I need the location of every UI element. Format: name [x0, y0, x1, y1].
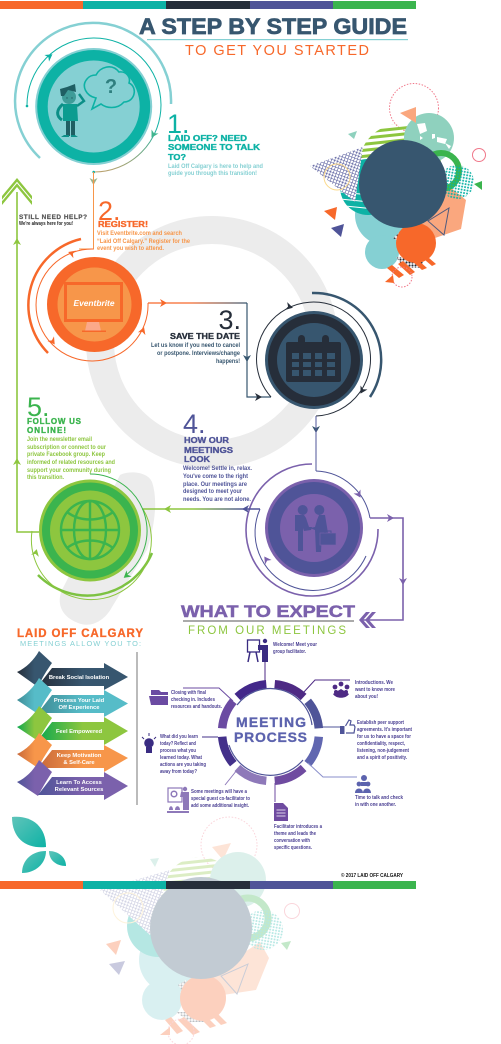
- step 5 text: subscription or connect to our: [27, 445, 107, 451]
- process item: peer support agreements: agreements. It's important: [357, 727, 412, 733]
- connector: green feedback line: [2, 178, 39, 532]
- arrows: step 2: [47, 248, 167, 347]
- process item: guest co-facilitator: [167, 770, 250, 813]
- process item: reflection: process what you: [160, 748, 196, 754]
- step 1 text: [167, 109, 263, 177]
- process item: reflection: learned today. What: [160, 755, 202, 761]
- step 4 text: place. Our meetings are: [183, 482, 248, 488]
- arrow: process your laid off experience: [17, 678, 128, 717]
- step 3 circle: [257, 293, 381, 416]
- arrow: learn to access relevant sources: [17, 760, 128, 800]
- process item: facilitator theme: Facilitator introduces a: [274, 824, 323, 830]
- step 1 circle: [15, 23, 171, 173]
- connector: step 1 to 2: [79, 172, 94, 249]
- arrows: step 1: [44, 51, 158, 185]
- title: TO GET YOU STARTED: [185, 43, 369, 59]
- process item: closing: checking in. Includes: [171, 697, 215, 703]
- arrow: keep motivation and self-care: & Self-Care: [63, 760, 95, 766]
- copyright: © 2017 LAID OFF CALGARY: [341, 872, 403, 879]
- step 5 text: this transition.: [27, 475, 64, 481]
- magnifier background: [60, 230, 324, 625]
- step 2 text: 2.: [98, 196, 121, 226]
- arrow: learn to access relevant sources: Learn To Access: [56, 780, 102, 786]
- step 2 circle: [28, 239, 148, 361]
- step 4 text: MEETINGS: [184, 446, 234, 455]
- laid off calgary heading: [17, 628, 143, 648]
- meeting process label: MEETING: [236, 714, 306, 730]
- process item: check in: Time to talk and check: [355, 795, 404, 801]
- icon: globe: [61, 501, 119, 559]
- connector: step 4 to 5: [142, 508, 260, 510]
- icon: calendar: [286, 335, 341, 382]
- process item: facilitator theme: [274, 783, 323, 851]
- process item: check in: [308, 763, 404, 808]
- process item: peer support agreements: for us to have a space for: [357, 734, 412, 740]
- bottom colour bar: [0, 881, 416, 889]
- arrow: learn to access relevant sources: Relevant Sources: [55, 787, 103, 793]
- background art: faded lower shapes: [100, 817, 300, 1044]
- step 3 text: happens!: [216, 359, 240, 365]
- step 1 text: 1.: [167, 109, 190, 139]
- step 2 text: [97, 196, 191, 252]
- icon: handshake: [295, 505, 336, 552]
- step 3 text: Let us know if you need to cancel: [151, 343, 240, 349]
- arrow: break social isolation: [17, 651, 128, 690]
- process item: peer support agreements: confidentiality, respect,: [357, 741, 405, 747]
- step 1 text: SOMEONE TO TALK: [168, 143, 260, 152]
- process item: reflection: today? Reflect and: [160, 741, 196, 747]
- meeting process ring: [222, 684, 319, 781]
- step 5 text: ONLINE!: [27, 426, 66, 435]
- still need help text: We're always here for you!: [19, 221, 73, 227]
- step 3 text: 3.: [218, 305, 241, 335]
- step 1 text: LAID OFF? NEED: [168, 134, 247, 143]
- step 1 text: Laid Off Calgary is here to help and: [168, 164, 263, 170]
- step 5 text: FOLLOW US: [27, 417, 82, 426]
- icon: monitor: Eventbrite: [74, 298, 115, 308]
- step 4 circle: [246, 464, 378, 596]
- icon: thought cloud: [84, 67, 134, 109]
- process item: facilitator theme: theme and leads the: [274, 831, 316, 837]
- divider: [136, 652, 138, 805]
- step 4 text: LOOK: [184, 455, 210, 464]
- process item: reflection: What did you learn: [160, 734, 198, 740]
- step 2 text: REGISTER!: [98, 220, 148, 229]
- step 5 text: support your community during: [27, 468, 111, 474]
- still need help text: STILL NEED HELP?: [19, 214, 87, 221]
- what to expect heading: [181, 603, 376, 637]
- arrows: step 3: [243, 302, 367, 433]
- process item: introductions: want to know more: [354, 687, 395, 693]
- top colour bar: [0, 1, 416, 9]
- arrow: process your laid off experience: Process Your Laid: [54, 698, 105, 704]
- step 4 text: designed to meet your: [183, 489, 243, 495]
- arrow: break social isolation: Break Social Isolation: [49, 675, 110, 681]
- arrow: process your laid off experience: Off Experience: [59, 705, 100, 711]
- process item: check in: in with one another.: [355, 802, 396, 808]
- process item: welcome: group facilitator.: [273, 649, 306, 655]
- process item: peer support agreements: listening, non-judgement: [357, 748, 409, 754]
- step 2 text: event you wish to attend.: [97, 246, 164, 252]
- step 1 text: guide you through this transition!: [168, 171, 257, 177]
- connector: step 4 to what to expect: [362, 518, 403, 620]
- process item: closing: Closing with final: [171, 690, 206, 696]
- arrows: step 5: [13, 238, 171, 581]
- process item: guest co-facilitator: add some additional insight.: [191, 803, 249, 809]
- step 5 text: 5.: [27, 392, 50, 422]
- step 5 text: Join the newsletter email: [27, 437, 92, 443]
- step 5 circle: [31, 474, 152, 600]
- process item: guest co-facilitator: special guest co-facilitator to: [191, 796, 250, 802]
- process item: peer support agreements: and a spirit of positivity.: [357, 755, 407, 761]
- process item: peer support agreements: [322, 720, 412, 761]
- process item: closing: resources and handouts.: [171, 704, 222, 710]
- step 4 text: [183, 409, 252, 503]
- still need help text: [19, 214, 87, 227]
- logo: leaves: [12, 817, 66, 873]
- decorative shape cluster: [310, 84, 486, 287]
- arrow: keep motivation and self-care: Keep Motivation: [57, 753, 102, 759]
- step 2 text: Visit Eventbrite.com and search: [97, 231, 182, 237]
- step 2 text: “Laid Off Calgary.” Register for the: [97, 239, 191, 245]
- step 1 text: TO?: [168, 153, 186, 162]
- step 4 text: needs. You are not alone.: [183, 497, 251, 503]
- arrow: feel empowered: Feel Empowered: [56, 729, 102, 735]
- connector: step 3 to 4: [315, 416, 317, 471]
- process item: facilitator theme: conversation with: [274, 838, 310, 844]
- step 5 text: private Facebook group. Keep: [27, 452, 105, 458]
- process item: welcome: Welcome! Meet your: [273, 642, 318, 648]
- step 4 text: 4.: [183, 409, 206, 439]
- process item: guest co-facilitator: Some meetings will have a: [191, 789, 248, 795]
- step 4 text: You've come to the right: [183, 474, 248, 480]
- arrows: step 4: [242, 490, 407, 585]
- step 3 text: [151, 305, 241, 365]
- laid off calgary heading: LAID OFF CALGARY: [17, 628, 143, 640]
- step 3 text: or postpone. Interviews/change: [157, 351, 241, 357]
- process item: welcome: [248, 639, 318, 682]
- process item: reflection: actions are you taking: [160, 762, 206, 768]
- title: A STEP BY STEP GUIDE: [139, 14, 407, 39]
- ribbon arrows list: [17, 651, 128, 800]
- connector: step 2 to 3: [148, 303, 271, 397]
- process item: closing: [149, 688, 233, 710]
- what to expect heading: WHAT TO EXPECT: [181, 603, 355, 621]
- arrow: keep motivation and self-care: [17, 733, 128, 772]
- step 5 text: informed of related resources and: [27, 460, 115, 466]
- meeting process label: PROCESS: [234, 729, 307, 745]
- step 5 text: [27, 392, 115, 481]
- arrow: feel empowered: [17, 706, 128, 745]
- title: [139, 14, 408, 59]
- meeting process label: [234, 714, 307, 745]
- icon: thought cloud: ?: [105, 76, 117, 98]
- icon: confused man: [58, 84, 84, 137]
- process item: facilitator theme: specific questions.: [274, 845, 312, 851]
- process item: introductions: [303, 680, 395, 700]
- process item: reflection: [142, 733, 218, 775]
- process item: peer support agreements: Establish peer support: [357, 720, 404, 726]
- icon: chevrons: [359, 612, 376, 628]
- step 4 text: Welcome! Settle in, relax.: [183, 466, 252, 472]
- process item: reflection: away from today?: [160, 769, 197, 775]
- step 3 text: SAVE THE DATE: [170, 332, 241, 341]
- step 4 text: HOW OUR: [184, 436, 229, 445]
- laid off calgary heading: MEETINGS ALLOW YOU TO:: [20, 639, 141, 648]
- process item: introductions: about you!: [355, 694, 378, 700]
- process item: introductions: Introductions. We: [355, 680, 393, 686]
- what to expect heading: FROM OUR MEETINGS: [188, 625, 346, 637]
